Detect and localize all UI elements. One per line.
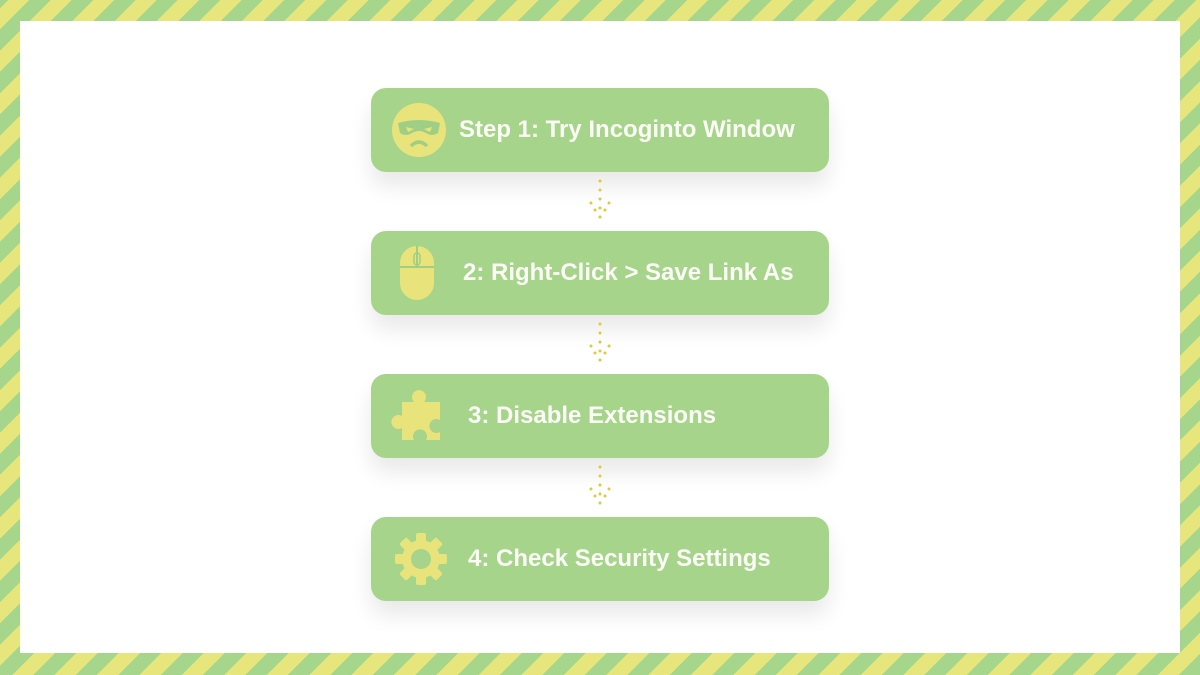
step 2 box — [371, 231, 829, 315]
arrow 2 — [590, 322, 610, 362]
step 3 box — [371, 374, 829, 458]
icon: puzzle — [391, 390, 440, 440]
step 4 text: 4: Check Security Settings — [468, 545, 771, 572]
step 1 text: Step 1: Try Incoginto Window — [459, 116, 795, 143]
step 1 box — [371, 88, 829, 172]
step 4 box — [371, 517, 829, 601]
arrow 1 — [590, 180, 610, 218]
icon: mouse — [400, 246, 434, 300]
step 3 text: 3: Disable Extensions — [468, 402, 716, 429]
arrow 3 — [590, 466, 610, 504]
icon: gear — [395, 533, 447, 585]
step 2 text: 2: Right-Click > Save Link As — [463, 259, 794, 286]
icon: incognito face — [392, 103, 446, 157]
